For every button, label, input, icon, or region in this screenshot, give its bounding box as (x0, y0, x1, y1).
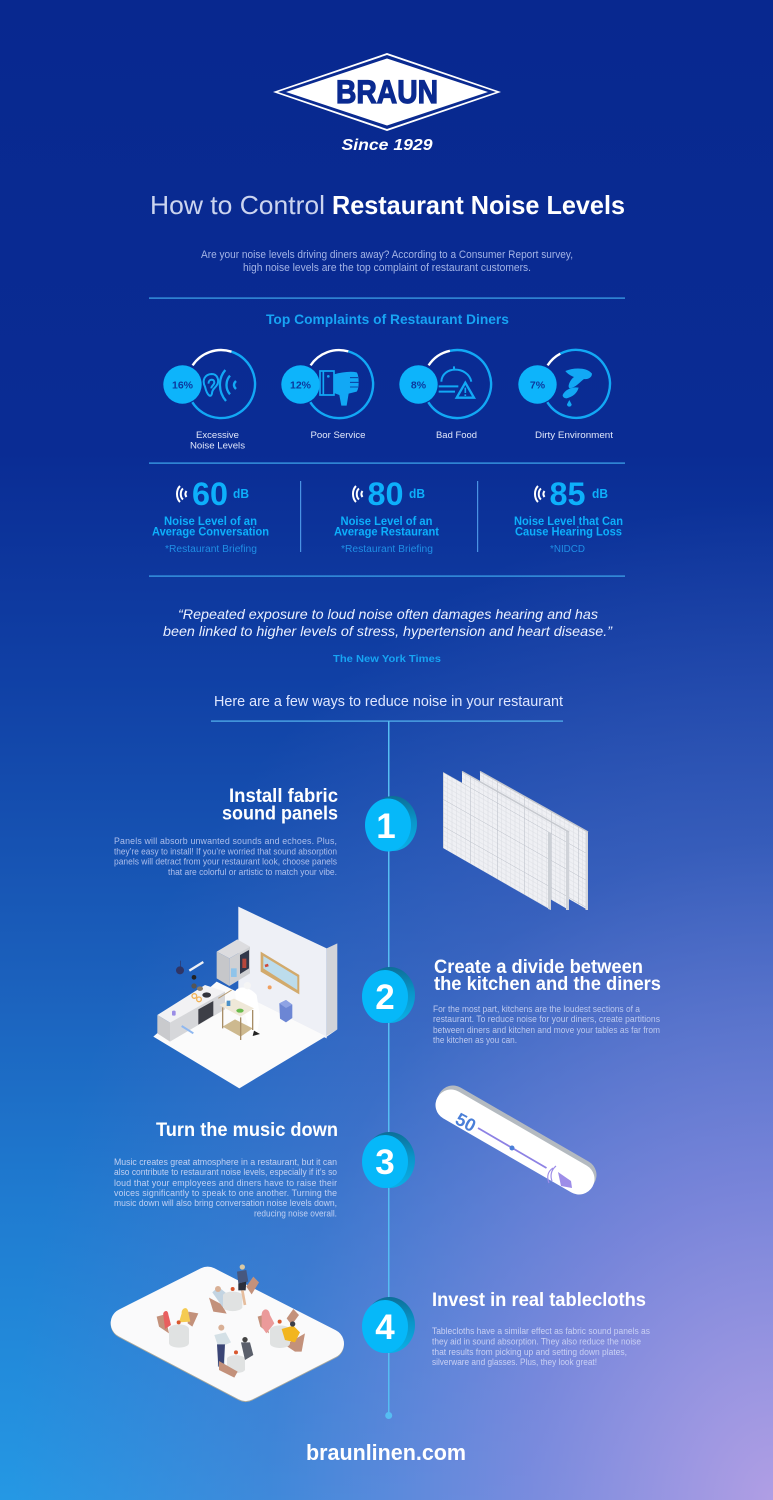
complaint: bad food 8%: 8% (411, 380, 427, 392)
badge 1: 1 (376, 807, 396, 846)
stat: 85 dB: dB (592, 486, 608, 501)
step 2 text (433, 956, 661, 1045)
trolley (218, 990, 254, 1040)
step 3 text: also contribute to restaurant noise levels, especially if it’s so (114, 1167, 337, 1177)
title: How to Control (150, 190, 325, 220)
stat: 85 dB: Cause Hearing Loss (515, 526, 622, 538)
table group right (258, 1309, 305, 1352)
complaint labels: Bad Food (436, 430, 477, 441)
back wall (238, 907, 337, 1038)
floor platform (126, 1282, 329, 1387)
quote: been linked to higher levels of stress, hypertension and heart disease.” (163, 623, 613, 639)
illustration: volume slider: 50 (452, 1109, 479, 1136)
table group top (209, 1264, 259, 1314)
stat: 60 dB: 60 (192, 476, 228, 512)
complaint labels: Poor Service (310, 430, 366, 441)
step 3 text (114, 1119, 338, 1218)
illustration: volume slider (451, 1101, 581, 1188)
step 3 text: loud that your employees and diners have to raise their (114, 1178, 337, 1188)
stat: 80 dB (334, 476, 439, 555)
step 2 text: the kitchen as you can. (433, 1035, 517, 1045)
step 4 text: silverware and glasses. Plus, they look great! (432, 1357, 597, 1367)
stat: 60 dB: Average Conversation (152, 526, 269, 538)
badge 4 (362, 1297, 415, 1353)
table group left (157, 1308, 198, 1348)
website: braunlinen.com (306, 1440, 466, 1465)
step 3 text: voices significantly to speak to one another. Turning the (114, 1188, 337, 1198)
stat: 85 dB: 85 (550, 476, 586, 512)
intro text (201, 249, 573, 274)
quote source: The New York Times (333, 653, 441, 665)
icon: sound waves (535, 486, 544, 502)
title: Restaurant Noise Levels (332, 190, 625, 220)
stat: 85 dB (514, 476, 623, 555)
illustration: dining room (126, 1264, 329, 1387)
icon: ear with sound waves (204, 370, 236, 401)
step 1 text: panels will detract from your restaurant look, choose panels (114, 856, 338, 866)
stat: 80 dB: dB (409, 486, 425, 501)
heading: top complaints: Top Complaints of Restaurant Diners (266, 311, 509, 327)
step 2 text: between diners and kitchen and move your tables as far from (433, 1025, 660, 1035)
hanging utensils (176, 961, 203, 989)
illustration: sound panels (443, 772, 588, 910)
step 1 text: sound panels (222, 802, 338, 824)
section intro: Here are a few ways to reduce noise in your restaurant (214, 693, 564, 710)
window (261, 952, 299, 994)
stat: 60 dB: Noise Level of an (164, 516, 257, 528)
complaint: bad food 8% (399, 350, 491, 418)
stat: 85 dB: *NIDCD (550, 544, 585, 555)
step 1 text: that are colorful or artistic to match your vibe. (168, 867, 337, 877)
complaint: dirty environment 7%: 7% (530, 380, 546, 392)
complaint: excessive noise levels 16% (163, 350, 255, 418)
step 4 text (432, 1289, 651, 1367)
step 4 text: Invest in real tablecloths (432, 1289, 646, 1311)
step 2 text: the kitchen and the diners (434, 973, 661, 995)
badge 3 (362, 1132, 415, 1188)
step 2 text: restaurant. To reduce noise for your diners, create partitions (433, 1014, 661, 1024)
illustration: kitchen (153, 907, 337, 1088)
stat: 60 dB (152, 476, 269, 555)
icon: thumbs down (320, 371, 359, 406)
timeline (211, 720, 563, 1419)
complaint: dirty environment 7% (518, 350, 610, 418)
complaint labels: Dirty Environment (535, 430, 613, 441)
step 1 text: Install fabric (229, 785, 338, 807)
stat: 80 dB: Noise Level of an (340, 516, 432, 528)
counter (157, 985, 225, 1042)
table group bottom (214, 1325, 253, 1378)
step 3 text: Music creates great atmosphere in a restaurant, but it can (114, 1157, 337, 1167)
step 2 text: Create a divide between (434, 956, 643, 978)
icon: dirty hand and spill (563, 369, 592, 407)
quote: “Repeated exposure to loud noise often damages hearing and has (178, 606, 598, 622)
step 4 text: they aid in sound absorption. They also reduce the noise (432, 1336, 641, 1346)
icon: sound waves (177, 486, 186, 502)
badge 2 (362, 967, 415, 1023)
step 1 text: they’re easy to install! If you’re worried that sound absorption (114, 846, 337, 856)
complaint: poor service 12% (281, 350, 373, 418)
floor (153, 982, 337, 1088)
title (150, 190, 625, 220)
icon: sound waves (353, 486, 362, 502)
icon: speaker (548, 1166, 572, 1188)
badge 2: 2 (375, 978, 395, 1017)
icon: food cloche with warning (439, 366, 474, 398)
quote (163, 606, 613, 639)
stat: 80 dB: Average Restaurant (334, 526, 439, 538)
badge 4: 4 (375, 1308, 395, 1347)
intro text: high noise levels are the top complaint of restaurant customers. (243, 262, 531, 274)
stat: 60 dB: dB (233, 486, 249, 501)
complaint labels (190, 430, 613, 452)
step 4 text: Tablecloths have a similar effect as fabric sound panels as (432, 1326, 651, 1336)
badge 3: 3 (375, 1143, 395, 1182)
step 3 text: Turn the music down (156, 1119, 338, 1141)
intro text: Are your noise levels driving diners away? According to a Consumer Report survey, (201, 249, 573, 261)
step 4 text: that results from picking up and setting down plates, (432, 1347, 627, 1357)
stat: 60 dB: *Restaurant Briefing (165, 544, 257, 555)
badge 1 (365, 796, 417, 852)
bin (279, 1000, 292, 1022)
complaint: excessive noise levels 16%: 16% (172, 380, 194, 392)
complaint labels: Excessive (196, 430, 239, 441)
stat: 80 dB: 80 (368, 476, 404, 512)
logo: Braun diamond: Since 1929 (342, 137, 433, 154)
step 3 text: reducing noise overall. (254, 1208, 337, 1218)
logo: Braun diamond: BRAUN (336, 74, 438, 110)
fridge (217, 939, 250, 986)
complaint: poor service 12%: 12% (290, 380, 312, 392)
chef (235, 982, 260, 1036)
stat: 80 dB: *Restaurant Briefing (341, 544, 433, 555)
stat: 85 dB: Noise Level that Can (514, 516, 623, 528)
step 2 text: For the most part, kitchens are the loudest sections of a (433, 1004, 640, 1014)
step 3 text: music down will also bring conversation noise levels down, (114, 1198, 337, 1208)
complaint labels: Noise Levels (190, 440, 245, 452)
logo: Braun diamond (273, 53, 501, 154)
step 1 text: Panels will absorb unwanted sounds and echoes. Plus, (114, 836, 337, 846)
step 1 text (114, 785, 338, 877)
